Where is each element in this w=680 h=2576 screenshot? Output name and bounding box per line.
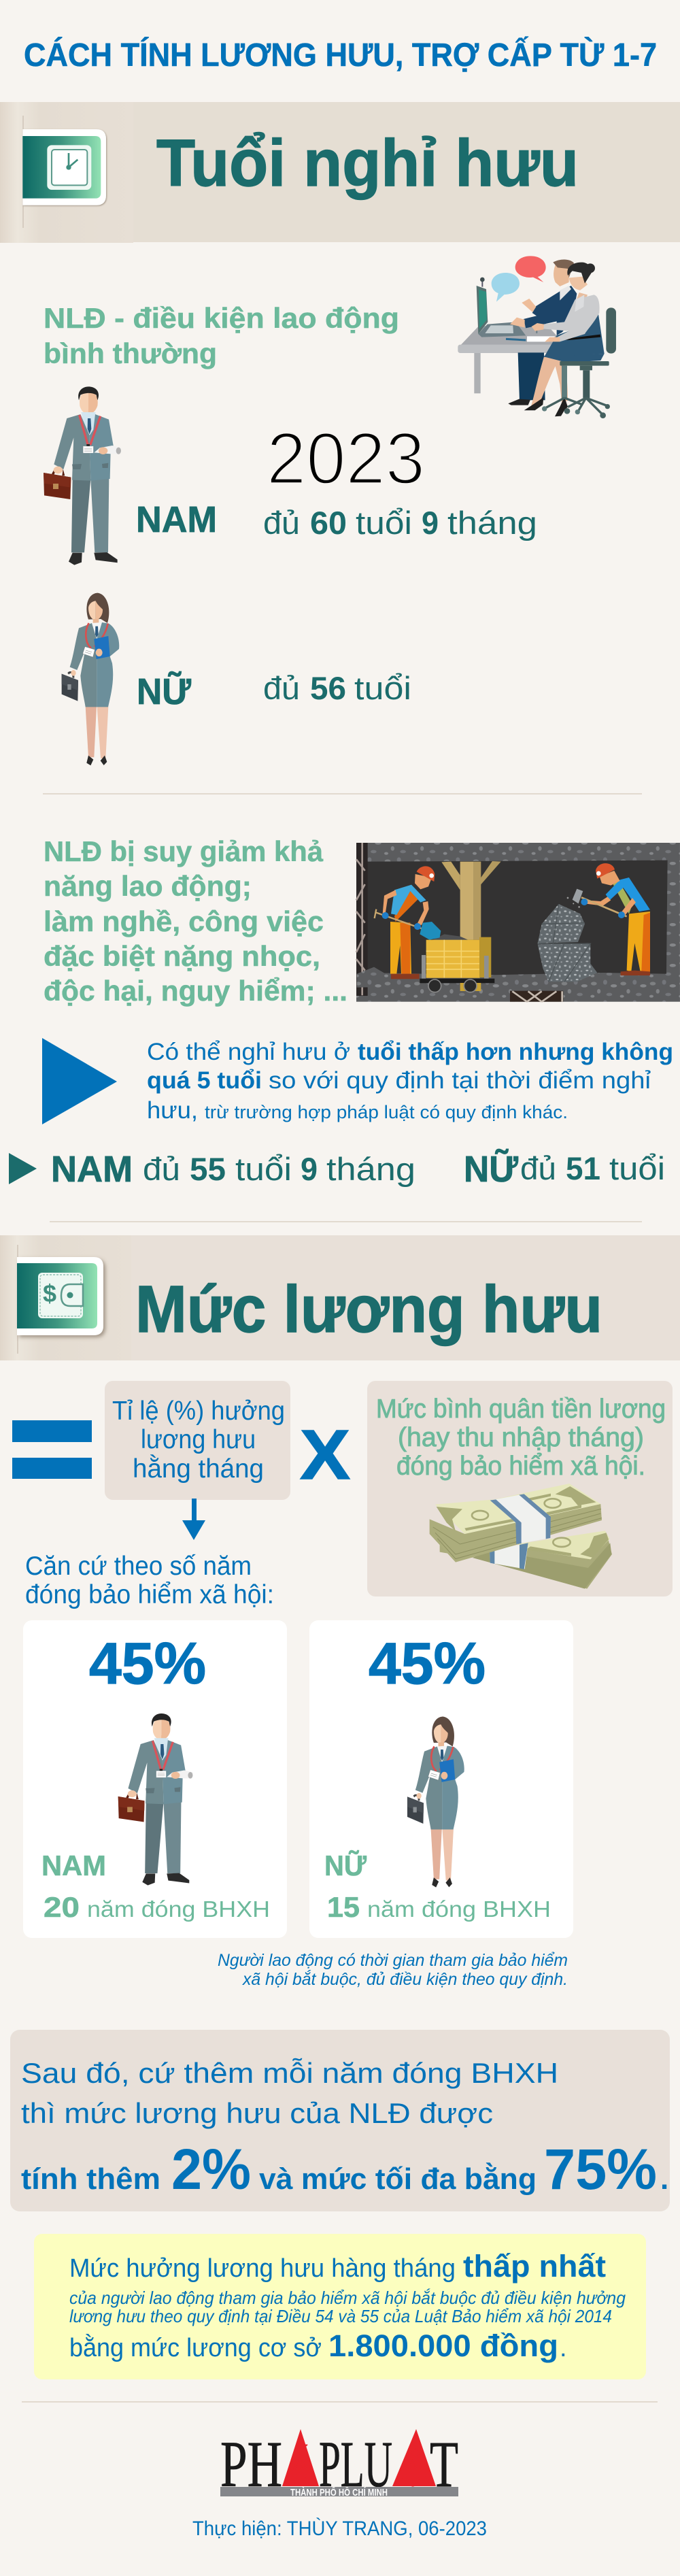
early retirement ages: tháng bbox=[326, 1151, 415, 1187]
panel: men rate: năm đóng BHXH bbox=[87, 1896, 270, 1922]
panel: additional percent: 75% bbox=[544, 2137, 657, 2201]
note: early retirement: Có thể nghỉ hưu ở bbox=[147, 1039, 350, 1065]
panel: women rate: 45% bbox=[369, 1631, 486, 1696]
icon: wallet bbox=[17, 1257, 103, 1335]
text: based on years of contribution: đóng bảo hiểm xã hội: bbox=[25, 1580, 274, 1609]
figure: woman bbox=[62, 593, 119, 765]
logo: Pháp Luật: Ậ bbox=[398, 2443, 430, 2494]
logo: Pháp Luật: PH bbox=[220, 2428, 282, 2500]
small arrow bbox=[9, 1153, 37, 1184]
panel: pension rate bbox=[105, 1381, 290, 1500]
subheading: reduced capacity and hazardous work: năng lao động; bbox=[44, 870, 252, 902]
subheading: reduced capacity and hazardous work: độc hại, nguy hiểm; ... bbox=[44, 975, 347, 1007]
early retirement ages: 55 bbox=[190, 1151, 226, 1187]
subheading: reduced capacity and hazardous work: đặc biệt nặng nhọc, bbox=[44, 940, 320, 972]
panel: additional percent: 2% bbox=[171, 2137, 251, 2201]
age: women: đủ bbox=[263, 670, 300, 706]
early retirement ages: NỮ bbox=[464, 1149, 518, 1190]
early retirement ages: đủ bbox=[520, 1150, 556, 1186]
panel: additional percent: và mức tối đa bằng bbox=[259, 2162, 537, 2196]
early retirement ages: tuổi bbox=[235, 1151, 292, 1187]
rock bbox=[538, 904, 585, 943]
logo: Pháp Luật: T bbox=[430, 2428, 458, 2500]
illustration: miners bbox=[356, 843, 680, 1002]
man bbox=[518, 352, 545, 400]
early retirement ages: 51 bbox=[566, 1150, 600, 1186]
note: early retirement bbox=[147, 1039, 673, 1124]
section header: Tuổi nghỉ hưu bbox=[0, 102, 680, 243]
figure: man bbox=[44, 386, 121, 565]
logo: Pháp Luật: THÀNH PHỐ HỒ CHÍ MINH bbox=[290, 2486, 388, 2498]
subheading: normal conditions bbox=[44, 302, 399, 369]
subheading: reduced capacity and hazardous work bbox=[44, 835, 347, 1007]
age: women bbox=[263, 670, 411, 706]
credit: Thực hiện: THÙY TRANG, 06-2023 bbox=[192, 2518, 487, 2540]
panel: women rate: 15 bbox=[327, 1891, 360, 1923]
label: NỮ: NỮ bbox=[137, 671, 191, 712]
icon: money bbox=[430, 1484, 612, 1589]
panel: women rate: NỮ bbox=[324, 1849, 367, 1881]
age: men: 9 bbox=[422, 505, 439, 541]
illustration: office meeting bbox=[458, 256, 616, 418]
note: early retirement: quá 5 tuổi bbox=[147, 1067, 262, 1094]
panel: average salary: Mức bình quân tiền lương bbox=[376, 1394, 666, 1424]
panel: minimum pension: . bbox=[560, 2334, 567, 2362]
panel: additional percent bbox=[10, 2030, 670, 2211]
age: men: tháng bbox=[447, 505, 537, 541]
age: men: đủ bbox=[263, 505, 300, 541]
panel: men rate: NAM bbox=[41, 1850, 106, 1881]
note: early retirement: hưu, bbox=[147, 1097, 198, 1124]
panel: additional percent: . bbox=[660, 2162, 668, 2196]
big arrow bbox=[42, 1038, 117, 1124]
panel: additional percent: thì mức lương hưu của NLĐ được bbox=[21, 2097, 493, 2129]
panel: men rate: 20 bbox=[44, 1891, 80, 1923]
age: men bbox=[263, 505, 537, 541]
year 2023: 2023 bbox=[267, 417, 425, 499]
subheading: normal conditions: NLĐ - điều kiện lao động bbox=[44, 302, 399, 334]
text: based on years of contribution bbox=[25, 1552, 274, 1609]
logo: Pháp Luật bbox=[220, 2428, 458, 2500]
logo: Pháp Luật: PLU bbox=[319, 2428, 392, 2500]
multiply sign: X bbox=[300, 1416, 350, 1494]
panel: average salary: (hay thu nhập tháng) bbox=[398, 1423, 644, 1452]
note: eligibility: Người lao động có thời gian tham gia bảo hiểm bbox=[218, 1951, 568, 1970]
early retirement ages: 9 bbox=[301, 1151, 318, 1187]
early retirement ages bbox=[51, 1149, 665, 1190]
note: early retirement: tuổi thấp hơn nhưng không bbox=[358, 1039, 673, 1065]
panel: minimum pension: bằng mức lương cơ sở bbox=[69, 2333, 322, 2362]
title: CÁCH TÍNH LƯƠNG HƯU, TRỢ CẤP TỪ 1-7 bbox=[24, 36, 657, 73]
age: men: 60 bbox=[310, 505, 347, 541]
arrow down bbox=[182, 1499, 205, 1540]
panel: men rate bbox=[23, 1620, 287, 1938]
panel: minimum pension: 1.800.000 đồng bbox=[328, 2328, 558, 2363]
subheading: reduced capacity and hazardous work: NLĐ bị suy giảm khả bbox=[44, 835, 324, 867]
note: early retirement: trừ trường hợp pháp luật có quy định khác. bbox=[205, 1102, 568, 1122]
panel: average salary bbox=[367, 1381, 673, 1596]
icon: wallet: $ bbox=[43, 1279, 56, 1307]
panel: women rate: năm đóng BHXH bbox=[367, 1896, 551, 1922]
logo: Pháp Luật: Á bbox=[286, 2443, 316, 2494]
icon: clock bbox=[22, 129, 106, 205]
panel: pension rate: lương hưu bbox=[141, 1425, 256, 1454]
panel: women rate bbox=[309, 1620, 573, 1938]
panel: minimum pension: lương hưu theo quy định tại Điều 54 và 55 của Luật Bảo hiểm xã hội 2014 bbox=[69, 2306, 612, 2326]
bottom scaffold bbox=[510, 991, 563, 1002]
note: eligibility: xã hội bắt buộc, đủ điều kiện theo quy định. bbox=[242, 1969, 568, 1989]
early retirement ages: NAM bbox=[51, 1149, 133, 1190]
panel: minimum pension bbox=[34, 2234, 646, 2379]
woman bbox=[544, 354, 605, 365]
pillar bbox=[460, 862, 474, 940]
section heading text: Mức lương hưu bbox=[135, 1272, 602, 1346]
text: based on years of contribution: Căn cứ theo số năm bbox=[25, 1552, 252, 1581]
label: NAM: NAM bbox=[136, 499, 217, 540]
cart bbox=[430, 934, 475, 943]
equals sign bbox=[12, 1420, 92, 1479]
panel: men rate: 45% bbox=[89, 1631, 206, 1696]
panel: minimum pension: Mức hưởng lương hưu hàng tháng bbox=[69, 2254, 456, 2283]
panel: average salary: đóng bảo hiểm xã hội. bbox=[396, 1452, 645, 1481]
panel: minimum pension: thấp nhất bbox=[463, 2249, 606, 2284]
subheading: normal conditions: bình thường bbox=[44, 337, 217, 369]
age: women: 56 bbox=[310, 670, 346, 706]
section header: Mức lương hưu bbox=[0, 1235, 680, 1360]
subheading: reduced capacity and hazardous work: làm nghề, công việc bbox=[44, 905, 324, 937]
age: women: tuổi bbox=[354, 670, 411, 706]
right miner bbox=[627, 911, 650, 971]
panel: pension rate: hằng tháng bbox=[133, 1454, 264, 1484]
note: early retirement: so với quy định tại thời điểm nghỉ bbox=[269, 1067, 651, 1094]
chair bbox=[606, 307, 616, 354]
age: men: tuổi bbox=[356, 505, 412, 541]
panel: minimum pension: của người lao động tham gia bảo hiểm xã hội bắt buộc đủ điều kiện hưởng bbox=[69, 2288, 626, 2308]
early retirement ages: đủ bbox=[143, 1151, 180, 1187]
panel: additional percent: Sau đó, cứ thêm mỗi năm đóng BHXH bbox=[21, 2057, 558, 2089]
note: eligibility bbox=[218, 1951, 568, 1989]
left miner bbox=[390, 922, 411, 974]
early retirement ages: tuổi bbox=[609, 1150, 665, 1186]
section heading text: Tuổi nghỉ hưu bbox=[156, 126, 579, 200]
panel: pension rate: Tỉ lệ (%) hưởng bbox=[112, 1396, 285, 1426]
panel: additional percent: tính thêm bbox=[21, 2162, 160, 2196]
